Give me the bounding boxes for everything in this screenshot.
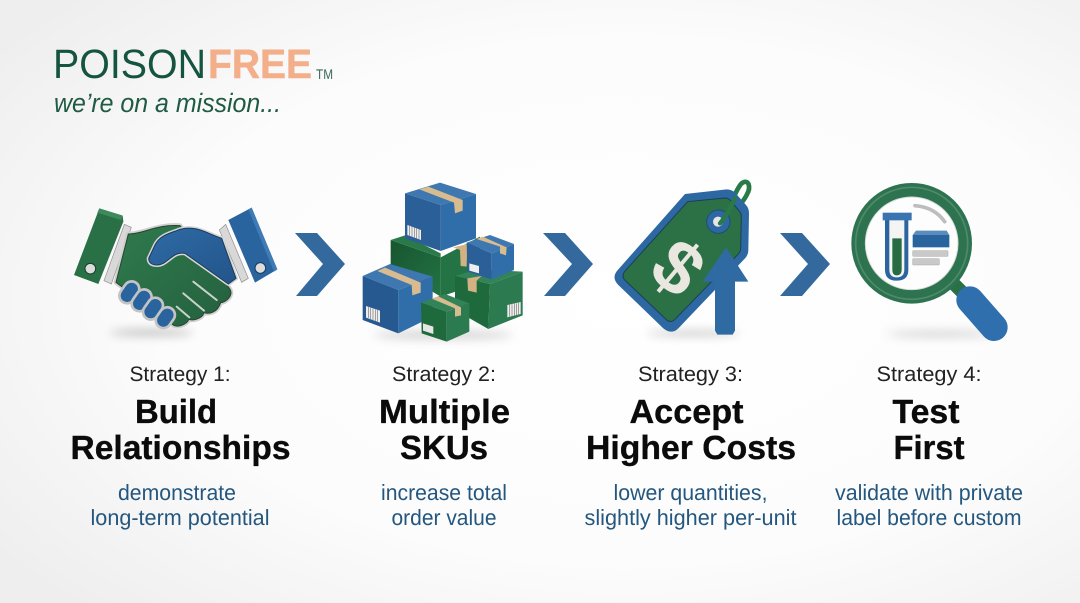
brand name: TM	[316, 66, 333, 82]
green hand	[116, 225, 231, 326]
up arrow	[703, 247, 748, 335]
right cuff	[228, 208, 277, 283]
strategy 3 text: Higher Costs	[586, 430, 796, 467]
strategy 1 text	[70, 363, 290, 530]
brand name: FREE	[208, 41, 312, 87]
strategy 4 text	[835, 363, 1023, 530]
blue hand	[149, 228, 236, 284]
icon: magnifier	[856, 187, 994, 337]
tagline: we’re on a mission...	[54, 88, 281, 118]
arrow 2	[543, 233, 593, 296]
dollar sign: $	[635, 222, 721, 313]
strategy 4 text: Strategy 4:	[876, 363, 982, 386]
strategy 2 text: increase total	[381, 480, 507, 505]
strategy 1 text: Relationships	[70, 430, 290, 467]
strategy 2 text: Strategy 2:	[392, 363, 496, 386]
strategy 2 text: order value	[392, 505, 496, 530]
test tube	[883, 213, 912, 281]
strategy 3 text: Accept	[630, 394, 744, 431]
tag ring	[720, 182, 749, 223]
handle	[953, 283, 994, 327]
strategy 2 text	[379, 363, 510, 530]
strategy 4 text: Test	[892, 394, 960, 431]
arrow 1	[295, 233, 345, 296]
strategy 3 text: lower quantities,	[614, 480, 768, 505]
icon: stacked boxes	[363, 183, 523, 342]
logo	[53, 41, 333, 118]
strategy 4 text: First	[894, 430, 964, 467]
tag hole	[707, 198, 735, 233]
silver wrist bands	[104, 224, 248, 284]
arrow 3	[780, 233, 830, 296]
icon: handshake	[74, 208, 277, 336]
strategy 1 text: long-term potential	[90, 505, 270, 530]
back green box	[391, 235, 480, 297]
left cuff	[74, 208, 123, 284]
left blue box	[363, 264, 433, 333]
strategy 2 text: Multiple	[379, 394, 510, 431]
strategy 1 text: Strategy 1:	[130, 363, 230, 386]
small green box	[421, 294, 469, 342]
strategy 4 text: validate with private	[835, 480, 1023, 505]
strategy 3 text	[584, 363, 796, 530]
data lines	[913, 251, 948, 265]
strategy 3 text: slightly higher per-unit	[584, 505, 796, 530]
finger lines	[177, 282, 217, 317]
strategy 2 text: SKUs	[400, 430, 488, 467]
blue fingers	[116, 278, 178, 331]
brand name	[53, 41, 333, 87]
data block	[913, 231, 949, 247]
strategy 3 text: Strategy 3:	[638, 363, 743, 386]
icon: price tag	[614, 182, 749, 336]
tag body	[614, 189, 749, 332]
top blue box	[405, 183, 476, 251]
right green box	[455, 269, 523, 329]
strategy 1 text: demonstrate	[118, 480, 236, 505]
brand name: POISON	[53, 41, 206, 87]
arc	[915, 206, 945, 222]
small blue box	[467, 235, 514, 279]
strategy 4 text: label before custom	[836, 505, 1022, 530]
strategy 1 text: Build	[135, 394, 217, 431]
lens ring	[856, 187, 968, 299]
